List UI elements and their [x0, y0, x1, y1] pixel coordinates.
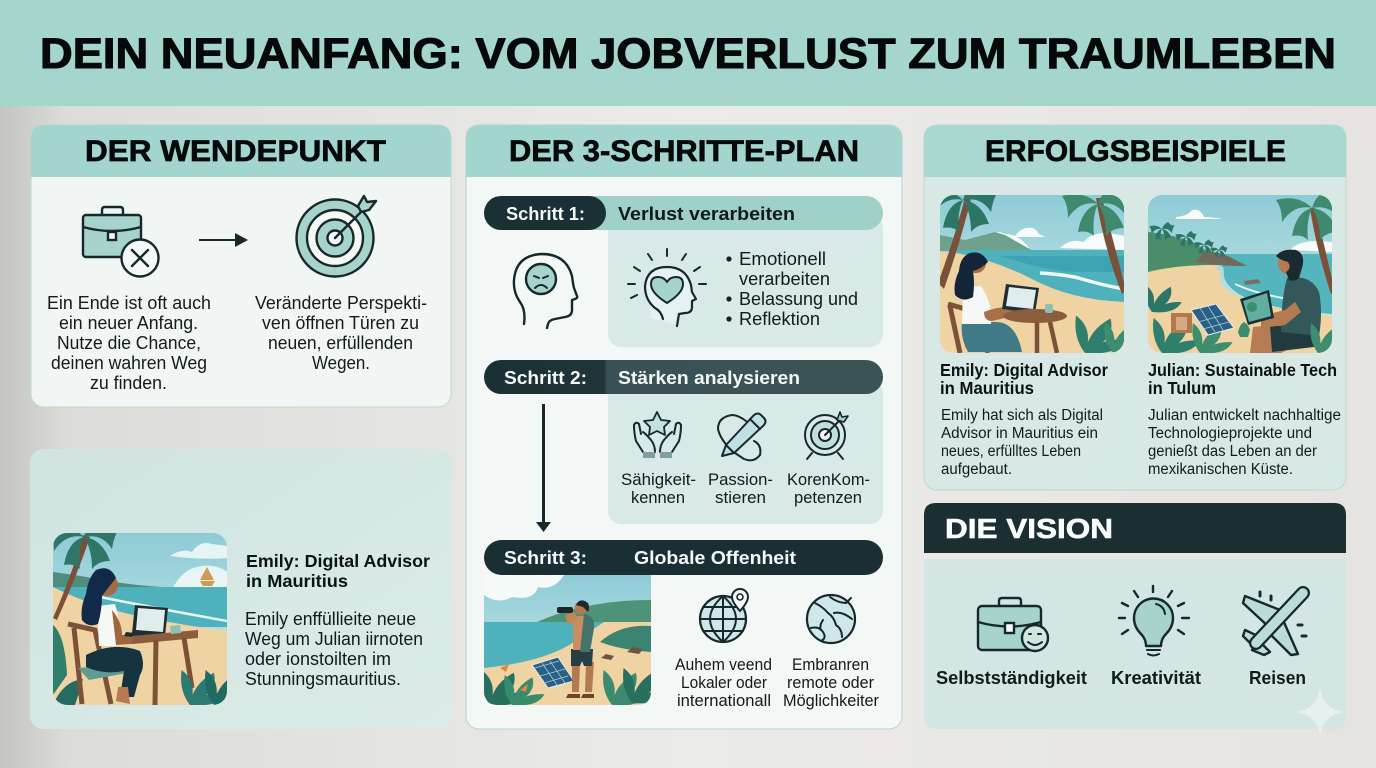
labels: Reisen	[1249, 668, 1306, 688]
bullet list: verarbeiten	[739, 269, 830, 289]
text: left column: Nutze die Chance,	[57, 333, 201, 353]
bullet list: Reflektion	[739, 309, 820, 329]
illustration: emily on the beach	[940, 195, 1124, 353]
title: DEIN NEUANFANG: VOM JOBVERLUST ZUM TRAUMLEBEN	[40, 30, 1336, 78]
name: julian: Julian: Sustainable Tech	[1148, 360, 1337, 380]
description: emily: neues, erfülltes Leben	[941, 443, 1081, 460]
step 1 header: Schritt 1:	[506, 204, 585, 224]
step 3 header	[484, 540, 883, 575]
name: emily: in Mauritius	[940, 378, 1034, 398]
step 1 header: Verlust verarbeiten	[618, 204, 795, 224]
heading: DER WENDEPUNKT	[85, 135, 386, 168]
icon: globe with pin	[700, 589, 748, 642]
heading: DER 3-SCHRITTE-PLAN	[509, 135, 859, 168]
description: julian: Julian entwickelt nachhaltige	[1148, 407, 1341, 424]
step 2 header: Schritt 2:	[504, 368, 587, 388]
text: right column: Wegen.	[312, 353, 370, 373]
panel: der wendepunkt	[31, 125, 451, 407]
labels: Kreativität	[1111, 668, 1201, 688]
step 2 header	[484, 360, 883, 394]
icon captions: Embranren	[792, 656, 869, 674]
vision header	[924, 503, 1346, 553]
woman	[86, 647, 143, 697]
name: emily	[940, 360, 1108, 398]
icon captions: Auhem veend	[675, 656, 772, 674]
icon: head with heart	[628, 249, 706, 326]
bullet list	[726, 249, 858, 329]
icon labels: stieren	[715, 489, 766, 507]
description: emily: Emily hat sich als Digital	[941, 407, 1103, 424]
description: emily: Advisor in Mauritius ein	[941, 425, 1098, 442]
text: right column: ven öffnen Türen zu	[262, 313, 419, 333]
description: julian: mexikanischen Küste.	[1148, 461, 1293, 478]
heading: ERFOLGSBEISPIELE	[985, 135, 1286, 168]
step 1 content box	[608, 215, 883, 347]
laptop	[132, 605, 168, 636]
icon labels: KorenKom-	[787, 471, 870, 489]
icon: briefcase with x	[83, 207, 158, 276]
vision header: DIE VISION	[945, 513, 1113, 544]
solar panel	[1191, 304, 1234, 335]
icon: light bulb	[1119, 586, 1189, 656]
name: in Mauritius	[246, 571, 348, 591]
table and laptop	[1002, 284, 1039, 313]
foliage	[1153, 318, 1196, 353]
icon captions: Möglichkeiter	[783, 692, 879, 710]
table	[132, 630, 198, 644]
woman	[962, 322, 1022, 352]
name: emily: Emily: Digital Advisor	[940, 360, 1108, 380]
icon captions: remote oder	[787, 674, 874, 692]
man	[572, 662, 594, 692]
text: right column: Veränderte Perspekti-	[255, 293, 427, 313]
labels: Selbstständigkeit	[936, 668, 1087, 688]
arrow: step 2 to step 3	[536, 404, 551, 532]
step 2 header: Stärken analysieren	[618, 368, 800, 388]
illustration: julian on the coast	[1148, 195, 1332, 353]
text: left column: Ein Ende ist oft auch	[47, 293, 211, 313]
description: emily: aufgebaut.	[941, 461, 1012, 478]
icon: briefcase with smiley	[978, 598, 1048, 651]
illustration: emily at desk on the beach	[53, 533, 227, 705]
name: Emily: Digital Advisor	[246, 551, 430, 571]
icon: heart with pencil	[718, 414, 766, 460]
description: oder ionstoilten im	[245, 649, 391, 669]
panel: emily profile	[30, 449, 452, 729]
icon captions: Lokaler oder	[681, 674, 767, 692]
icon: small target	[805, 412, 848, 459]
description: julian: genießt das Leben an der	[1148, 443, 1317, 460]
icon labels: kennen	[631, 489, 685, 507]
step 3 header: Globale Offenheit	[634, 548, 796, 568]
icon labels: Passion-	[708, 471, 773, 489]
bullet list: Emotionell	[739, 249, 826, 269]
icon: airplane	[1243, 592, 1306, 655]
text: left column	[47, 293, 211, 393]
icon labels: petenzen	[794, 489, 862, 507]
bullet list: Belassung und	[739, 289, 858, 309]
description: julian: Technologieprojekte und	[1148, 425, 1312, 442]
name: julian	[1148, 360, 1337, 398]
step 1 header	[484, 196, 883, 230]
title band	[0, 0, 1376, 106]
name	[246, 551, 430, 591]
step 3 header: Schritt 3:	[504, 548, 587, 568]
illustration: traveler with camera	[484, 575, 651, 705]
chair	[948, 304, 988, 353]
text: left column: ein neuer Anfang.	[59, 313, 198, 333]
description: julian	[1148, 407, 1341, 478]
text: right column: neuen, erfüllenden	[268, 333, 413, 353]
man	[1250, 326, 1287, 353]
description: emily	[941, 407, 1103, 478]
step 2 content box	[608, 380, 883, 524]
icon: target	[296, 196, 376, 276]
description: Stunningsmauritius.	[245, 669, 401, 689]
sparkle	[1296, 688, 1344, 736]
description: Weg um Julian iirnoten	[245, 629, 423, 649]
arrow	[199, 233, 248, 247]
text: left column: zu finden.	[90, 373, 167, 393]
name: julian: in Tulum	[1148, 378, 1216, 398]
icon captions	[675, 656, 879, 710]
icon: hands with star	[634, 412, 681, 458]
icon captions: internationall	[677, 692, 771, 710]
text: left column: deinen wahren Weg	[51, 353, 207, 373]
panel: erfolgsbeispiele	[924, 125, 1350, 490]
description	[245, 609, 423, 689]
labels	[936, 668, 1306, 688]
panel: die vision	[924, 503, 1346, 736]
text: right column	[255, 293, 427, 373]
chair	[68, 624, 111, 704]
icon labels	[621, 471, 870, 507]
icon: sad head	[514, 254, 577, 328]
description: Emily enffüllieite neue	[245, 609, 416, 629]
icon: world map globe	[807, 595, 855, 643]
panel: der 3-schritte-plan	[466, 125, 902, 729]
icon labels: Sähigkeit-	[621, 471, 696, 489]
